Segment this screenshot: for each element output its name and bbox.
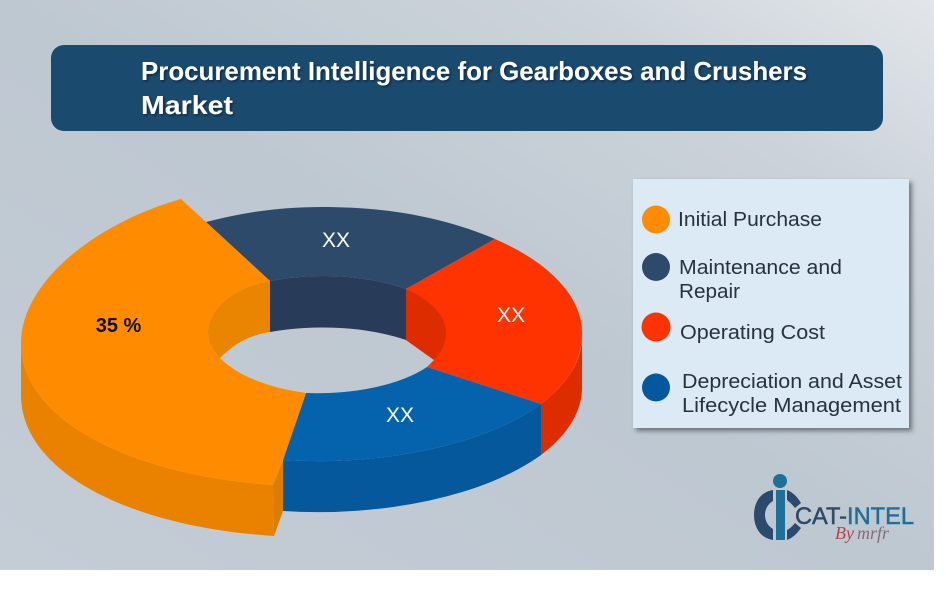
value label: red XX: XX <box>497 304 525 327</box>
3D donut chart <box>21 199 582 536</box>
legend item: operating cost <box>642 312 825 344</box>
value label: 35 %: 35 % <box>96 315 142 337</box>
logo: CAT-INTEL by mrfr <box>754 474 914 543</box>
icon: C and i mark <box>754 474 801 540</box>
logo wordmark: CAT-INTEL <box>795 503 914 530</box>
legend item: depreciation and asset lifecycle management <box>642 371 902 417</box>
legend item: maintenance and repair <box>642 253 842 303</box>
segment: depreciation and asset lifecycle (blue) <box>283 367 541 512</box>
title text: Procurement Intelligence for Gearboxes and Crushers <box>141 56 807 86</box>
logo tagline: Bymrfr <box>835 523 890 543</box>
legend item: maintenance and repair: Repair <box>679 281 740 303</box>
segment: operating cost (red) <box>406 239 582 455</box>
value label: navy XX: XX <box>322 229 350 252</box>
title banner <box>51 45 883 131</box>
title text <box>141 56 807 120</box>
legend item: operating cost: Operating Cost <box>680 322 825 344</box>
legend panel <box>633 179 909 428</box>
legend item: depreciation and asset lifecycle management: Lifecycle Management <box>682 395 901 417</box>
segment: maintenance and repair (navy) <box>206 207 495 340</box>
legend item: initial purchase: Initial Purchase <box>678 209 822 231</box>
title text: Market <box>141 90 233 120</box>
legend item: initial purchase <box>642 206 822 234</box>
segment: initial purchase (orange) <box>21 199 306 536</box>
legend item: maintenance and repair: Maintenance and <box>679 257 842 279</box>
value label: blue XX: XX <box>386 404 414 427</box>
legend item: depreciation and asset lifecycle management: Depreciation and Asset <box>682 371 902 393</box>
